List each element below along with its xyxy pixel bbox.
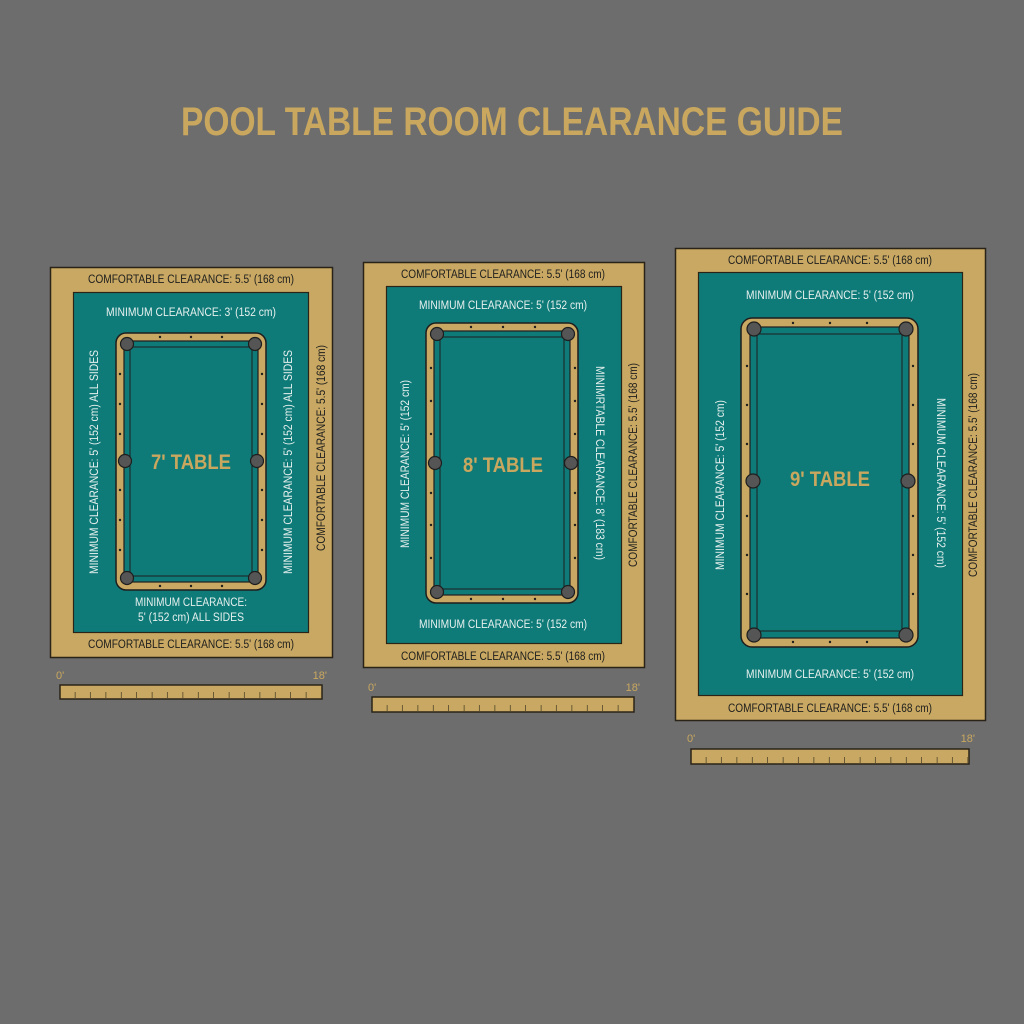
clearance labels: 9 ft: COMFORTABLE CLEARANCE: 5.5' (168 cm) xyxy=(968,373,980,577)
clearance labels: 9 ft: MINIMUM CLEARANCE: 5' (152 cm) xyxy=(746,290,914,302)
panel: 9 ft table xyxy=(676,248,986,720)
scale ruler: 7 ft: 18' xyxy=(313,670,327,682)
clearance labels: 8 ft: MINIMUM CLEARANCE: 5' (152 cm) xyxy=(419,619,587,631)
clearance labels: 9 ft: COMFORTABLE CLEARANCE: 5.5' (168 cm) xyxy=(728,703,932,715)
clearance labels: 7 ft: MINIMUM CLEARANCE: 3' (152 cm) xyxy=(106,307,276,319)
scale ruler: 7 ft: 0' xyxy=(56,670,64,682)
clearance labels: 8 ft: COMFORTABLE CLEARANCE: 5.5' (168 cm) xyxy=(628,363,640,567)
table: 8 ft xyxy=(426,323,578,603)
panel: 7 ft table xyxy=(50,268,332,658)
table label: 7 ft: 7' TABLE xyxy=(151,451,231,474)
title: POOL TABLE ROOM CLEARANCE GUIDE xyxy=(181,100,843,144)
scale ruler: 8 ft: 0' xyxy=(368,682,376,694)
scale ruler: 9 ft xyxy=(687,733,975,764)
clearance labels: 7 ft: 5' (152 cm) ALL SIDES xyxy=(138,612,244,624)
scale ruler: 8 ft: 18' xyxy=(626,682,640,694)
clearance labels: 7 ft: COMFORTABLE CLEARANCE: 5.5' (168 cm) xyxy=(88,274,294,286)
clearance labels: 7 ft: MINIMUM CLEARANCE: xyxy=(135,597,247,609)
clearance labels: 7 ft xyxy=(88,274,328,651)
table label: 8 ft: 8' TABLE xyxy=(463,454,543,477)
clearance labels: 8 ft: MINIMRTABLE CLEARANCE: 8' (183 cm) xyxy=(593,366,605,560)
scale ruler: 9 ft: 18' xyxy=(961,733,975,745)
clearance labels: 8 ft: MINIMUM CLEARANCE: 5' (152 cm) xyxy=(419,300,587,312)
table label: 9 ft: 9' TABLE xyxy=(790,468,870,491)
clearance labels: 8 ft: MINIMUM CLEARANCE: 5' (152 cm) xyxy=(400,380,412,548)
clearance labels: 9 ft: MINIMUM CLEARANCE: 5' (152 cm) xyxy=(715,400,727,570)
clearance labels: 7 ft: COMFORTABLE CLEARANCE: 5.5' (168 cm) xyxy=(88,639,294,651)
clearance labels: 8 ft: COMFORTABLE CLEARANCE: 5.5' (168 cm) xyxy=(401,269,605,281)
panel: 8 ft table xyxy=(364,262,644,668)
clearance labels: 7 ft: MINIMUM CLEARANCE: 5' (152 cm) ALL SIDES xyxy=(89,350,101,574)
scale ruler: 9 ft: 0' xyxy=(687,733,695,745)
clearance labels: 8 ft: COMFORTABLE CLEARANCE: 5.5' (168 cm) xyxy=(401,651,605,663)
table: 7 ft xyxy=(116,333,266,590)
scale ruler: 7 ft xyxy=(56,670,327,699)
clearance labels: 9 ft: COMFORTABLE CLEARANCE: 5.5' (168 cm) xyxy=(728,255,932,267)
clearance labels: 9 ft: MINIMUM CLEARANCE: 5' (152 cm) xyxy=(934,398,946,568)
clearance labels: 7 ft: COMFORTABLE CLEARANCE: 5.5' (168 cm) xyxy=(316,345,328,551)
clearance labels: 8 ft xyxy=(400,269,640,663)
clearance labels: 9 ft: MINIMUM CLEARANCE: 5' (152 cm) xyxy=(746,669,914,681)
scale ruler: 8 ft xyxy=(368,682,640,712)
clearance labels: 9 ft xyxy=(715,255,980,715)
table: 9 ft xyxy=(741,318,918,647)
clearance labels: 7 ft: MINIMUM CLEARANCE: 5' (152 cm) ALL SIDES xyxy=(283,350,295,574)
